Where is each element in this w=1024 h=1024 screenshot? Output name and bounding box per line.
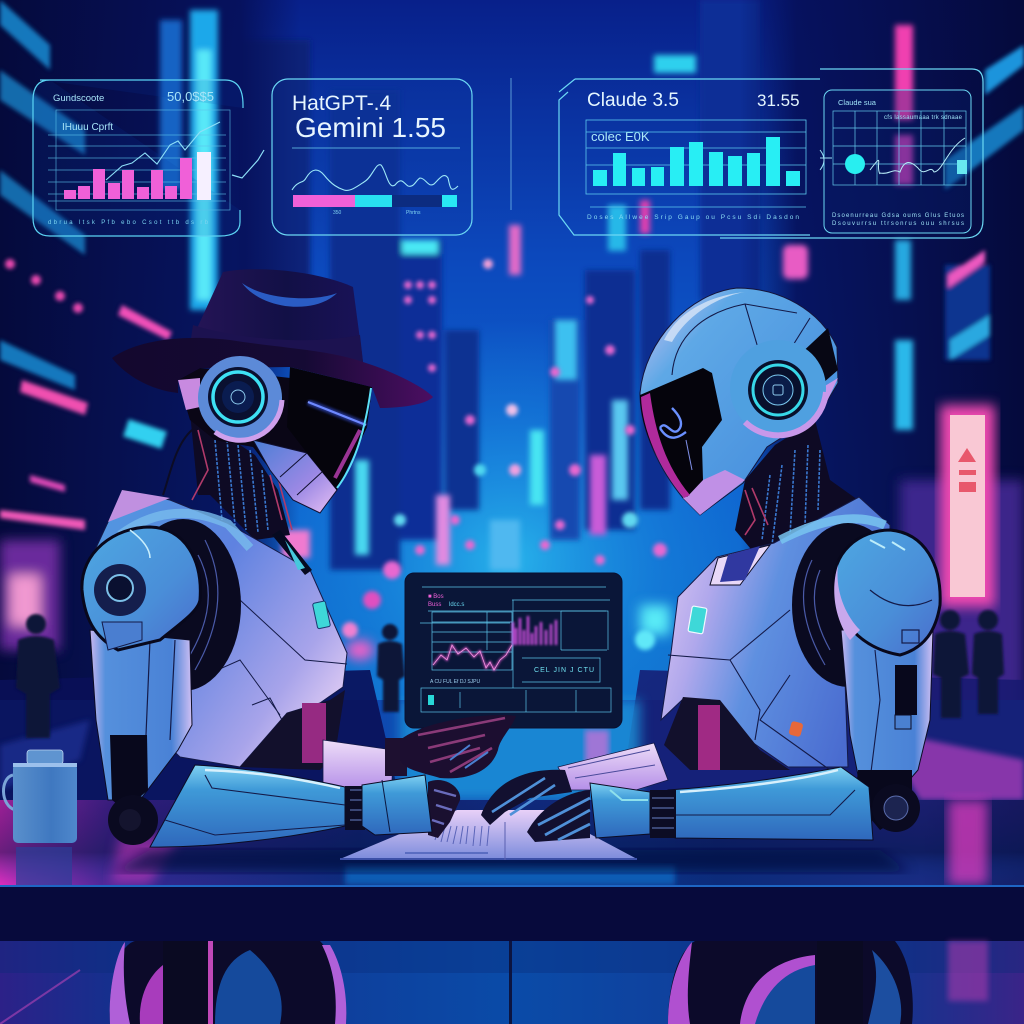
shoulder joint ring [125,519,241,691]
ear sensor [730,340,826,436]
tablet: central dashboard: CEL JIN J CTU [534,667,594,674]
panel: Claude 3.5 bar chart: 31.55 [757,91,800,110]
table top surface [0,800,1024,887]
bars [64,158,192,199]
panel: right data chart [720,69,983,238]
heading: model names: Gemini 1.55 [295,112,446,143]
visor [640,368,722,497]
bars [593,137,800,186]
panel: Claude 3.5 bar chart: colec E0K [591,129,650,144]
right robot head [640,288,838,515]
upper arm [90,630,192,810]
forearm [108,765,345,847]
panel: Claude 3.5 bar chart: Doses Allwee Srip Gaup ou Pcsu Sdi Dasdon [587,214,799,221]
front hand [527,783,676,842]
divider [510,78,512,210]
chin guard [253,440,337,513]
floor below table [0,941,1024,1024]
stacked progress bar [293,195,457,207]
lower body reflection [110,941,346,1024]
shoulder cap [834,530,940,655]
neck wires [163,412,292,540]
helmet [178,367,372,513]
torso [661,497,890,770]
heading: model names [292,92,446,143]
tablet: central dashboard: ldcc.s [449,602,464,608]
tablet: central dashboard: A CU FUL Ef DJ SJPU [430,679,480,685]
panel: right data chart: Claude sua [838,98,877,107]
tablet: central dashboard: ■ Bos [428,594,444,600]
left building neon slats [0,0,1024,530]
table [0,800,1024,1024]
panel: GPT-4 bar chart hologram: 50,0$$5 [167,89,214,104]
shoulder cap [82,527,200,650]
panel: Claude 3.5 bar chart: Claude 3.5 [587,90,679,111]
bokeh city lights [342,259,667,650]
upper arm [841,630,933,830]
panel: Claude 3.5 bar chart [559,79,820,235]
heading: model names: HatGPT-.4 [292,92,392,115]
front hand [345,775,460,838]
cup reflection [16,847,72,885]
paper on table [340,810,637,860]
left robot head [112,269,433,513]
indicator dot [845,154,865,174]
panel: right data chart: cfs lassaumaaa trk sdnaae [884,115,963,121]
hat [112,269,433,408]
table front edge [0,887,1024,941]
panel: HatGPT-4 Gemini 1.55: 350 [333,210,342,216]
coffee cup [3,750,77,843]
panel: GPT-4 bar chart hologram: IHuuu Cprft [62,122,113,133]
panel: right data chart: Dsouvurrsu ttrsonrus ouu shrsus [832,221,964,227]
torso [95,490,347,770]
tablet: central dashboard [405,573,622,728]
neck wires [735,420,858,560]
panel: HatGPT-4 Gemini 1.55: Phrtns [406,210,421,216]
tablet: central dashboard: Buss [428,602,441,608]
ear sensor [198,356,282,440]
panel: right data chart: Dsoenurreau Gdsa oums Glus Etuos [832,213,964,219]
right robot [481,420,940,1024]
lower body reflection [668,941,913,1024]
panel: GPT-4 bar chart hologram: dbrua ltsk Pfb ebo Csot ttb ds rb [48,220,209,226]
left robot [82,412,516,1024]
background silhouettes: pedestrians [16,610,1004,738]
neon sign: right pillar [940,405,995,607]
forearm [668,767,920,840]
visor [287,367,372,490]
panel: GPT-4 bar chart hologram: Gundscoote [53,93,104,104]
panel: GPT-4 bar chart hologram [33,80,264,236]
panel: HatGPT-4 Gemini 1.55 [272,79,472,235]
helmet [640,288,838,515]
rear arm [481,743,668,825]
shoulder joint ring [792,523,904,687]
rear arm [323,715,516,790]
